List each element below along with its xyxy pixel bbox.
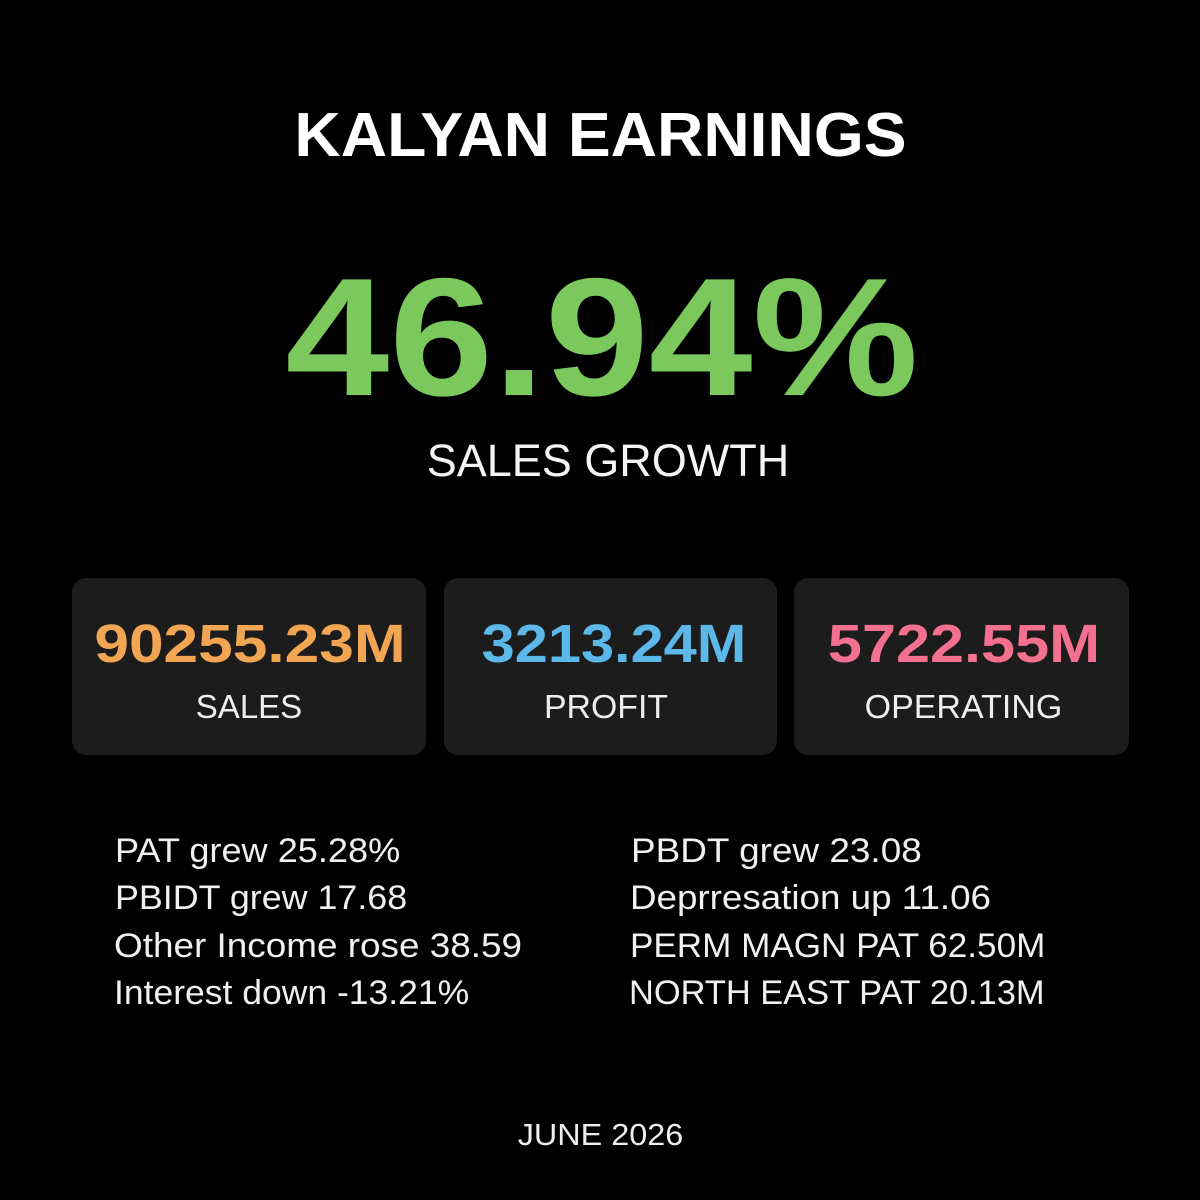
panel: operating	[794, 578, 1129, 755]
profit value: 3213.24M	[482, 614, 746, 674]
right item 1: PBDT grew 23.08	[631, 832, 922, 870]
panel: profit	[444, 578, 777, 755]
right item 4: NORTH EAST PAT 20.13M	[629, 974, 1045, 1012]
right item 3: PERM MAGN PAT 62.50M	[630, 927, 1045, 965]
sales value: 90255.23M	[94, 614, 406, 674]
right text block	[629, 832, 1045, 1012]
headline caption: SALES GROWTH	[427, 435, 789, 486]
panel: sales	[72, 578, 426, 755]
right item 2: Deprresation up 11.06	[630, 879, 991, 917]
title: KALYAN EARNINGS	[294, 101, 907, 170]
left text block	[114, 832, 522, 1012]
date footer: JUNE 2026	[518, 1117, 683, 1152]
headline growth figure: 46.94%	[285, 243, 919, 431]
operating label: OPERATING	[865, 688, 1062, 725]
profit label: PROFIT	[544, 688, 668, 725]
operating value: 5722.55M	[828, 614, 1100, 674]
sales label: SALES	[196, 688, 302, 725]
left item 4: Interest down -13.21%	[114, 974, 469, 1012]
left item 3: Other Income rose 38.59	[114, 927, 522, 965]
left item 2: PBIDT grew 17.68	[115, 879, 407, 917]
left item 1: PAT grew 25.28%	[115, 832, 400, 870]
